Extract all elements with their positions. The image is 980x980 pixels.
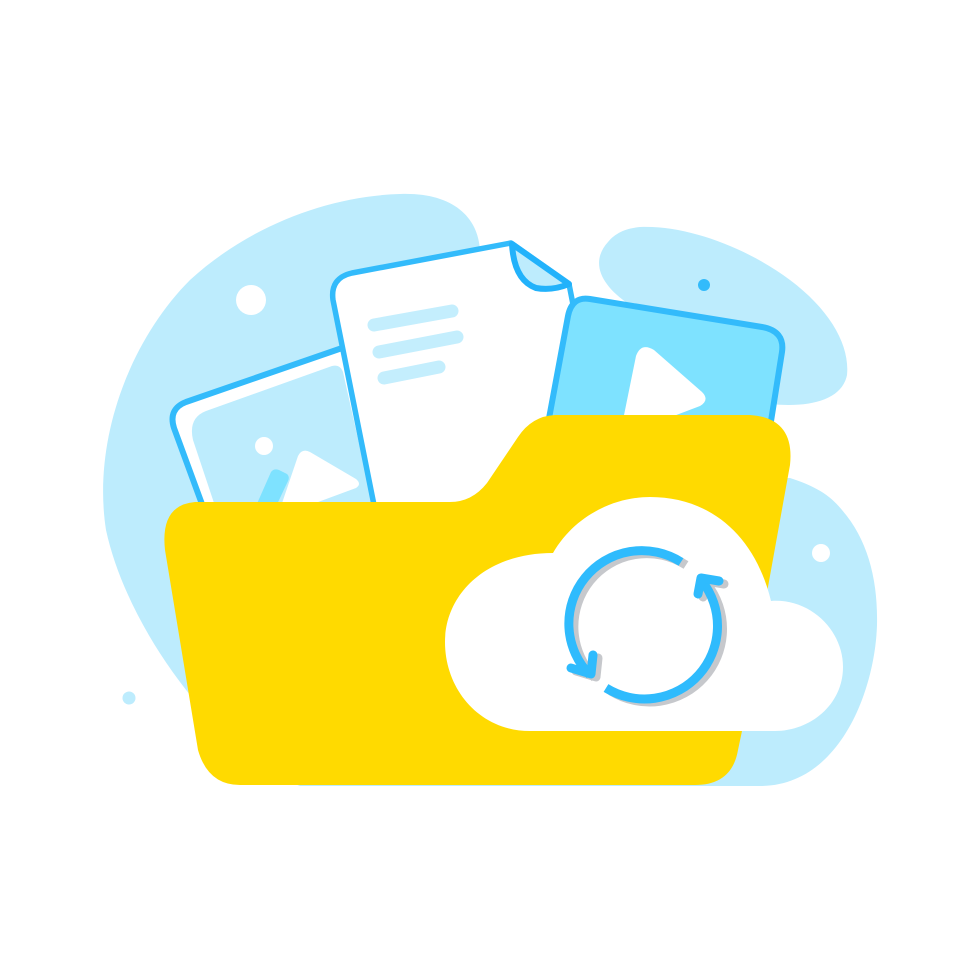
sync icon — [569, 551, 719, 699]
page fold — [512, 244, 569, 289]
decorative dot: small bottom left — [122, 692, 136, 704]
icon: play triangle — [622, 347, 706, 425]
background blob: top right — [599, 227, 847, 405]
document page — [333, 243, 580, 515]
text lines — [374, 311, 457, 378]
video card: left tilted — [172, 347, 385, 515]
folder — [164, 415, 790, 785]
decorative dot: white right — [812, 544, 830, 562]
cloud — [445, 497, 843, 731]
background blob: large left — [103, 194, 877, 786]
sync icon shadow — [574, 554, 724, 702]
decorative dot: blue top right — [698, 279, 710, 291]
video card: right tilted — [545, 299, 782, 440]
decorative dot: white top left — [236, 285, 266, 315]
